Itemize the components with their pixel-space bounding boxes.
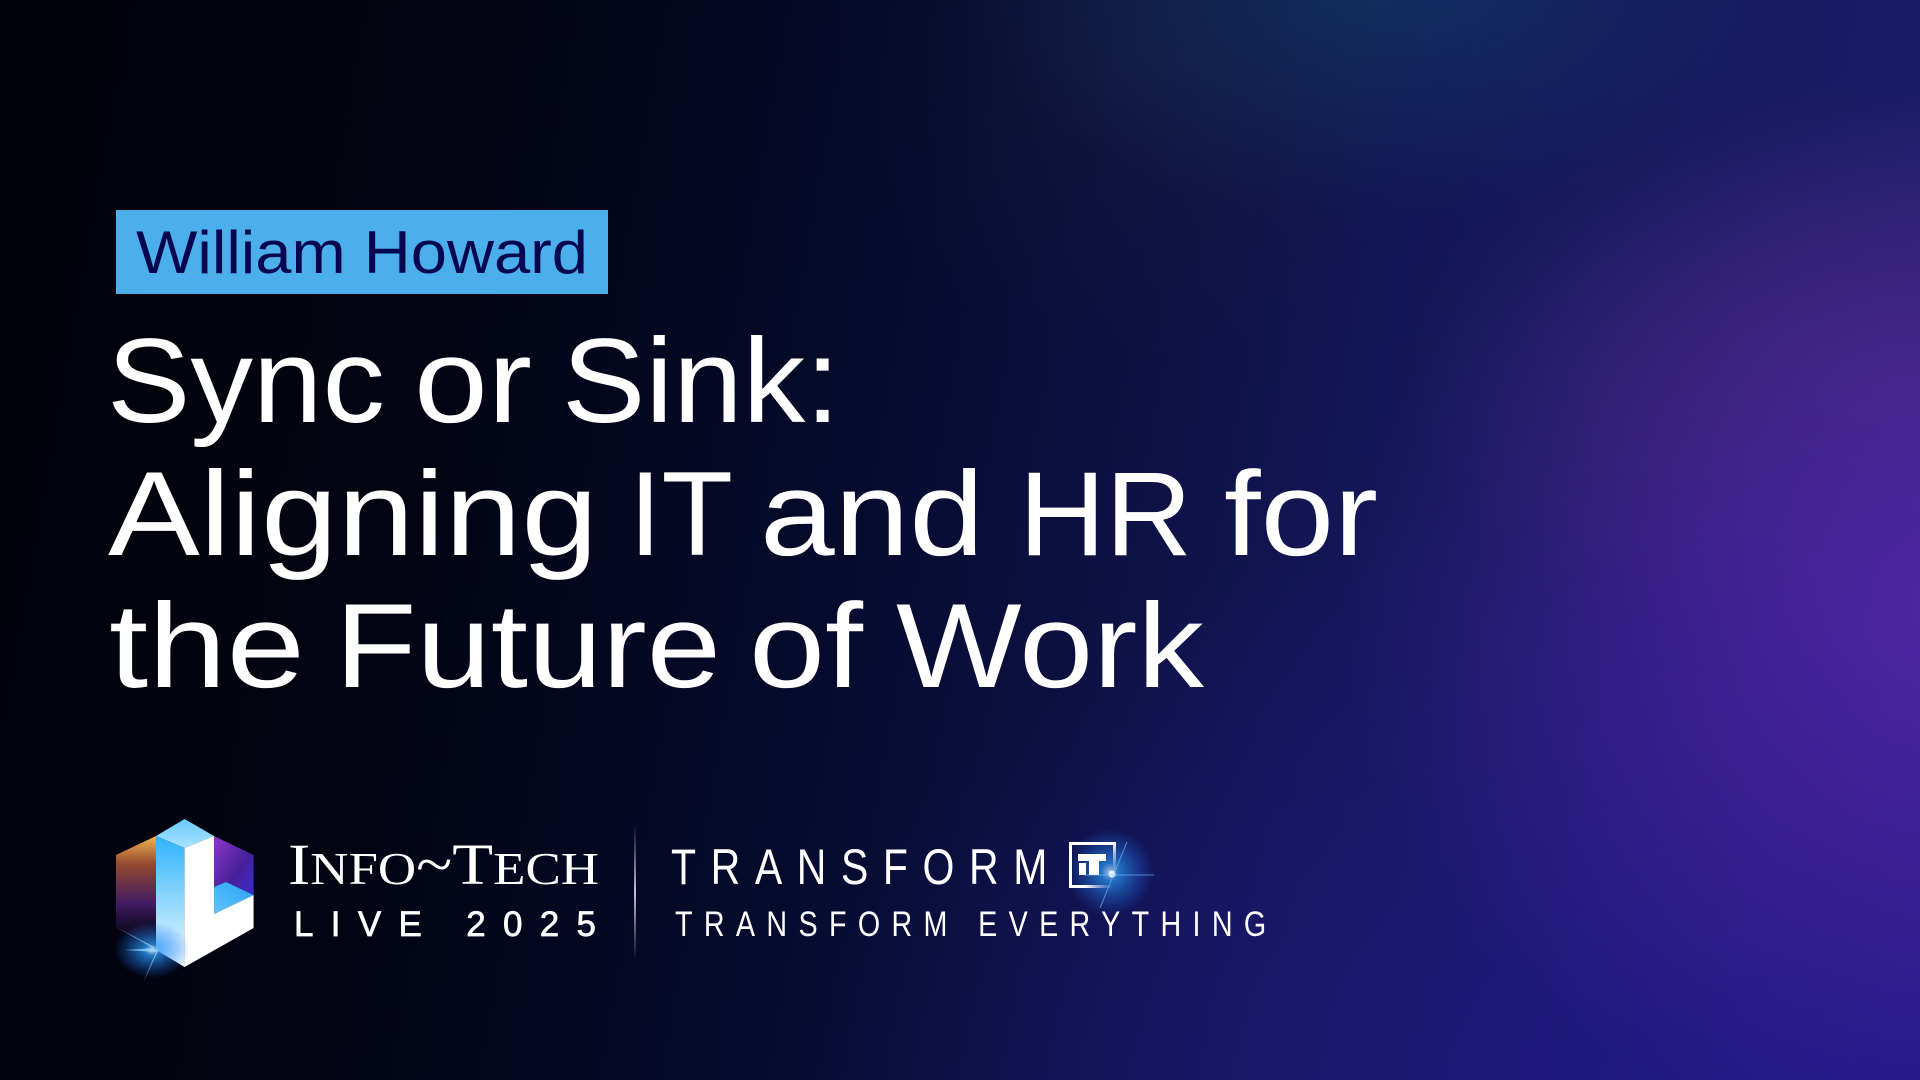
logo text: Info-Tech Live 2025 <box>288 832 599 944</box>
logo text: Info-Tech Live 2025: LIVE 2025 <box>294 905 596 944</box>
title: Work <box>896 579 1205 713</box>
title <box>107 314 1378 713</box>
title: Sync <box>107 314 385 448</box>
title: Sink: <box>562 314 840 448</box>
icon: Info-Tech Live hexagon logo <box>114 819 254 983</box>
title: and <box>760 447 984 581</box>
divider <box>634 825 636 960</box>
title: IT <box>629 447 733 581</box>
title: or <box>414 314 532 448</box>
title: HR <box>1019 447 1192 581</box>
title: the <box>109 579 305 713</box>
title: Future <box>335 579 721 713</box>
title: Aligning <box>108 447 598 581</box>
logo text: Transform Everything: TRANSFORM EVERYTHING <box>675 904 1266 944</box>
speaker tag <box>116 210 608 294</box>
speaker tag: William Howard <box>136 219 588 286</box>
logo text: Transform Everything: TRANSFORM <box>671 839 1047 895</box>
icon: iT box with flare <box>1066 828 1154 916</box>
title: for <box>1224 447 1378 581</box>
logo text: Info-Tech Live 2025: INFO~TECH <box>288 832 599 897</box>
logo text: Transform Everything <box>671 839 1266 944</box>
title: of <box>749 579 864 713</box>
